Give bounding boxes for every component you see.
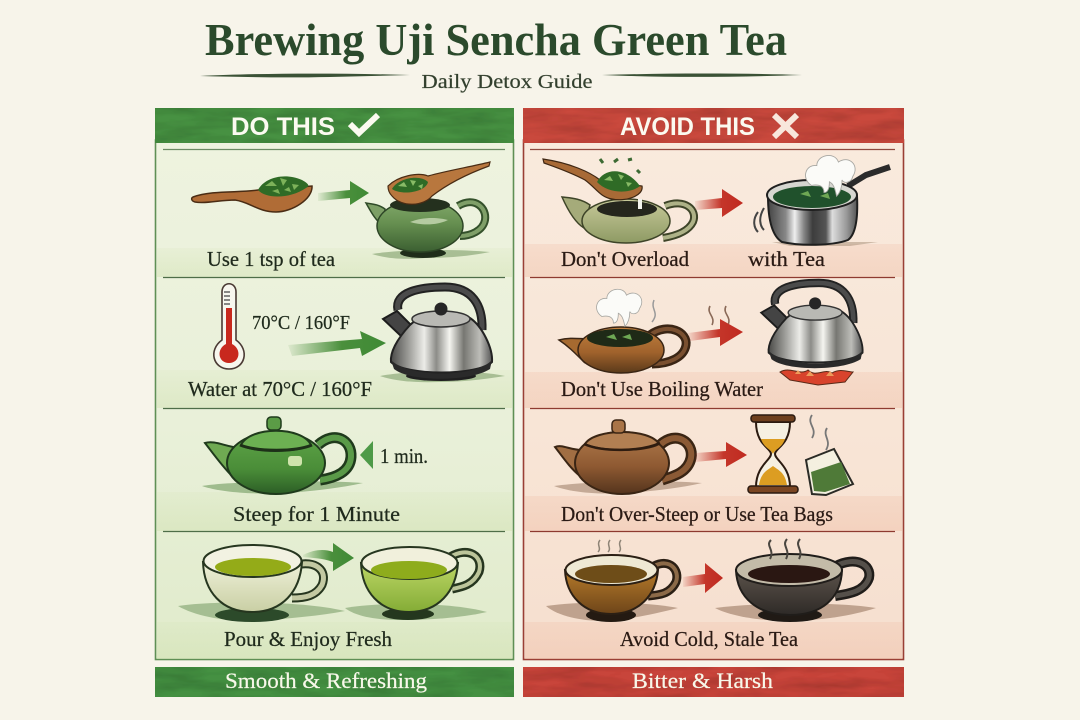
arrow bbox=[695, 442, 747, 467]
step: avoid cold, stale tea bbox=[525, 539, 902, 659]
step: pour and enjoy bbox=[157, 543, 512, 659]
arrow bbox=[288, 331, 386, 356]
icon: spoon with tea leaves bbox=[192, 176, 312, 212]
step: don't use boiling water bbox=[525, 283, 902, 408]
icon: silver kettle bbox=[380, 287, 505, 382]
icon: green teapot with spoon bbox=[366, 162, 490, 259]
step: don't over-steep or use tea bags bbox=[525, 415, 902, 531]
temperature callout: 70°C / 160°F bbox=[252, 312, 350, 334]
label: Pour & Enjoy Fresh bbox=[224, 627, 392, 651]
label: Steep for 1 Minute bbox=[233, 502, 400, 526]
subtitle with rules: Daily Detox Guide bbox=[422, 71, 593, 93]
step: don't overload with tea bbox=[525, 155, 902, 277]
title: Brewing Uji Sencha Green Tea bbox=[205, 14, 787, 65]
icon: green teapot bbox=[202, 417, 363, 494]
label: Use 1 tsp of tea bbox=[207, 247, 336, 271]
panel background: green bbox=[156, 140, 514, 660]
step: steep for one minute bbox=[157, 417, 512, 531]
header: avoid this: AVOID THIS bbox=[620, 113, 755, 141]
step: don't overload with tea: with Tea bbox=[748, 247, 826, 271]
label: Don't Use Boiling Water bbox=[561, 377, 763, 401]
icon: timer arrow bbox=[360, 441, 373, 469]
arrow bbox=[318, 181, 369, 205]
icon: boiling pan bbox=[754, 155, 890, 246]
icon: hourglass bbox=[748, 415, 798, 493]
icon: dark cup bbox=[715, 539, 876, 622]
arrow bbox=[683, 563, 723, 593]
label: Don't Over-Steep or Use Tea Bags bbox=[561, 502, 833, 526]
icon: kettle on flames bbox=[761, 283, 863, 385]
footer: smooth and refreshing bbox=[155, 667, 514, 697]
icon: tea bag bbox=[806, 415, 853, 495]
icon: brown teapot with steam bbox=[559, 289, 686, 373]
footer: bitter and harsh: Bitter & Harsh bbox=[632, 668, 773, 693]
footer: smooth and refreshing: Smooth & Refreshing bbox=[225, 668, 427, 693]
arrow bbox=[695, 189, 743, 217]
panel background: red bbox=[524, 140, 904, 660]
timer callout: 1 min. bbox=[380, 444, 428, 468]
step: use 1 tsp of tea bbox=[157, 162, 512, 277]
icon: brown cup bbox=[546, 540, 678, 622]
steam squiggles bbox=[709, 306, 729, 325]
step: water temperature bbox=[157, 284, 512, 408]
header: do this: DO THIS bbox=[231, 113, 335, 141]
header: do this bbox=[155, 108, 514, 143]
icon: pale cup bbox=[178, 545, 345, 622]
footer: bitter and harsh bbox=[523, 667, 904, 697]
label: Avoid Cold, Stale Tea bbox=[620, 627, 799, 651]
icon: overloaded teapot bbox=[543, 159, 694, 243]
subtitle with rules bbox=[200, 71, 802, 93]
icon: clay teapot bbox=[554, 420, 702, 494]
labels: Don't Overload bbox=[561, 247, 689, 271]
label: Water at 70°C / 160°F bbox=[188, 377, 372, 401]
arrow bbox=[688, 319, 743, 346]
icon: green cup bbox=[345, 547, 487, 620]
header: avoid this bbox=[523, 108, 904, 143]
panel: avoid this bbox=[523, 108, 904, 660]
icon: thermometer bbox=[214, 284, 244, 369]
arrow bbox=[303, 543, 354, 571]
panel: do this bbox=[155, 108, 514, 660]
